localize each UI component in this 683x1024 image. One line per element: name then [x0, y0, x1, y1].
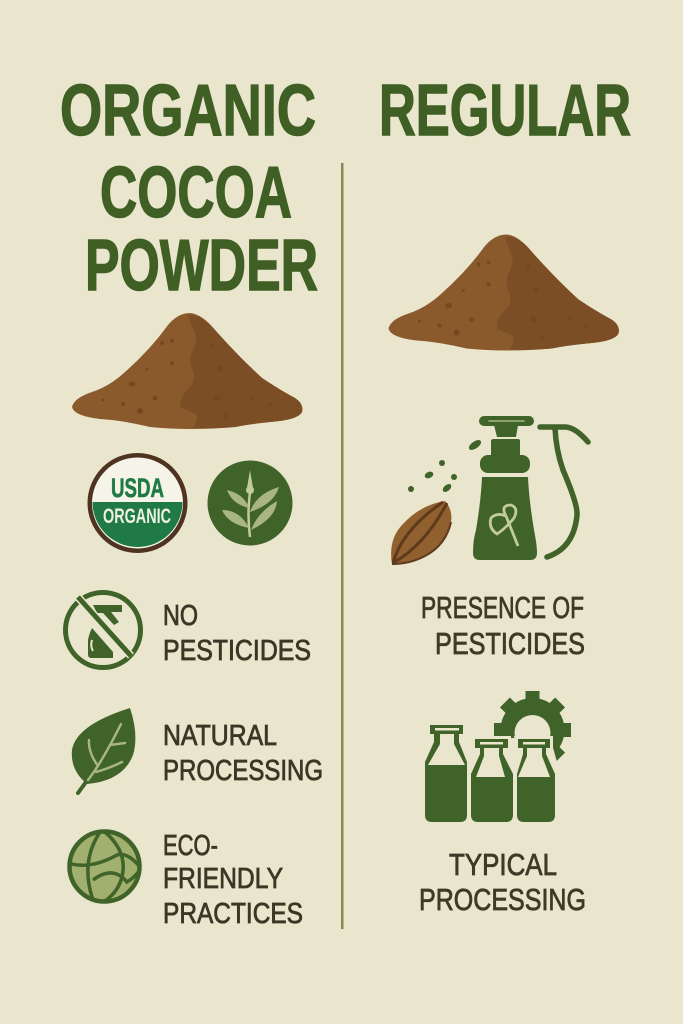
cocoa pod [391, 501, 451, 564]
droplets [408, 438, 483, 494]
hose [540, 427, 588, 557]
label: typical processing: TYPICAL [449, 847, 557, 882]
label: typical processing [419, 847, 586, 917]
label: eco-friendly practices: ECO- [163, 830, 218, 862]
label: no pesticides: NO [163, 600, 198, 632]
badge: plant sprig [208, 460, 292, 546]
center divider [341, 163, 344, 929]
label: presence of pesticides: PRESENCE OF [421, 590, 584, 625]
icon: pesticide sprayer with cocoa pod [391, 416, 588, 564]
label: natural processing: PROCESSING [163, 755, 323, 787]
badge: USDA organic: USDA [111, 473, 164, 503]
label: natural processing [163, 720, 323, 787]
bottle three [517, 739, 555, 822]
label: eco-friendly practices: PRACTICES [163, 898, 303, 930]
cocoa powder pile: organic [72, 313, 302, 429]
icon: leaf [72, 708, 135, 793]
bottle one [425, 725, 467, 822]
label: eco-friendly practices: FRIENDLY [163, 863, 283, 895]
gear [494, 691, 571, 769]
bottle halos [471, 739, 555, 822]
title: organic cocoa powder: COCOA [100, 153, 292, 233]
sprayer bottle [473, 416, 537, 560]
title: organic cocoa powder: POWDER [85, 226, 318, 306]
badge: USDA organic [88, 453, 188, 553]
label: natural processing: NATURAL [163, 720, 277, 752]
cocoa powder pile: regular [388, 234, 619, 350]
label: no pesticides: PESTICIDES [163, 635, 311, 667]
icon: no pesticides [66, 592, 140, 668]
label: presence of pesticides [421, 590, 585, 661]
icon: bottles and gear [425, 691, 571, 822]
label: eco-friendly practices [163, 830, 303, 930]
icon: globe [68, 832, 140, 902]
label: typical processing: PROCESSING [419, 882, 586, 917]
bottle two [471, 739, 513, 822]
label: no pesticides [163, 600, 311, 667]
title: organic cocoa powder [60, 71, 318, 306]
badge: USDA organic: ORGANIC [103, 505, 171, 528]
label: presence of pesticides: PESTICIDES [435, 626, 585, 661]
title: organic cocoa powder: ORGANIC [60, 71, 316, 151]
